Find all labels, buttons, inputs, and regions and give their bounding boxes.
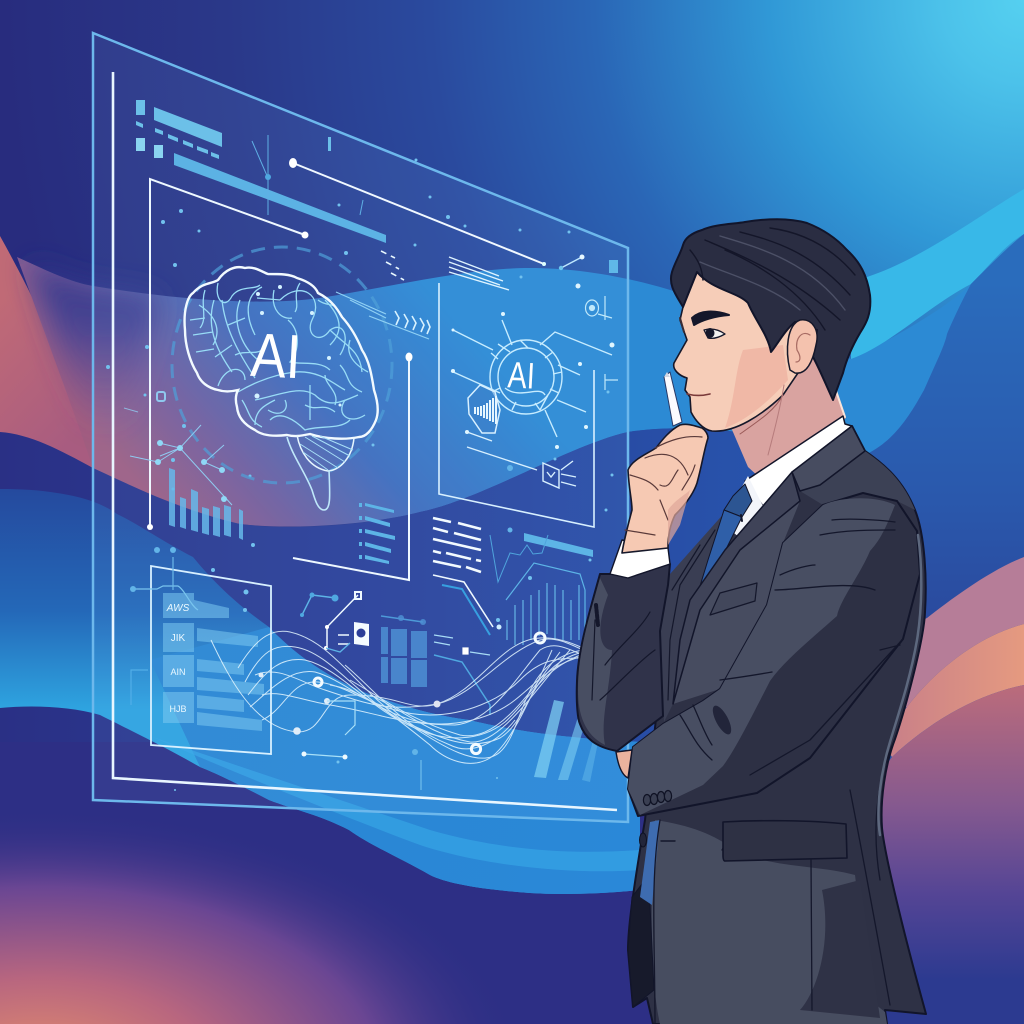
eye xyxy=(704,329,725,338)
small circuit icon xyxy=(300,592,369,652)
dashed ring xyxy=(172,247,392,483)
grid tiles xyxy=(381,615,427,687)
small connector xyxy=(302,701,421,790)
mouth xyxy=(687,394,710,396)
tie lower xyxy=(640,820,660,905)
text lines block xyxy=(433,518,481,572)
jacket pocket xyxy=(723,821,847,861)
list rows xyxy=(359,503,395,564)
AI circuit frame xyxy=(439,283,594,527)
ear xyxy=(787,320,817,373)
brain frame xyxy=(150,179,409,580)
scatter dots xyxy=(106,158,614,791)
hand xyxy=(622,424,708,553)
slanted bar xyxy=(524,533,593,557)
hair xyxy=(671,219,870,400)
jacket seams xyxy=(654,640,895,1024)
chevrons xyxy=(395,311,430,334)
jacket button xyxy=(640,833,646,847)
brain folds xyxy=(190,283,368,430)
icon: target small xyxy=(586,296,618,390)
tie xyxy=(688,484,752,625)
lapel xyxy=(673,426,865,704)
slanted bars xyxy=(534,700,600,782)
bar chart xyxy=(169,468,243,540)
inner lining xyxy=(628,880,654,1007)
network graph xyxy=(124,392,232,505)
wave data flow xyxy=(211,631,583,763)
panel glass xyxy=(93,33,628,822)
hidden hand under arm xyxy=(616,750,632,778)
brain stem xyxy=(287,437,330,510)
panel: data table: AIN xyxy=(170,667,186,677)
shirt collar xyxy=(730,416,852,540)
connector line xyxy=(289,158,546,266)
wave ring nodes xyxy=(314,633,545,754)
shoulder xyxy=(800,451,915,510)
breast pocket xyxy=(710,583,757,615)
icon: brain with AI xyxy=(172,247,392,510)
jacket lit lower front xyxy=(652,820,887,1024)
circuit line xyxy=(433,535,585,640)
back rim highlight xyxy=(878,535,921,835)
stat lines xyxy=(336,292,429,339)
front sleeve crossing arm xyxy=(628,493,920,816)
figure: thinking businessman xyxy=(577,219,926,1024)
sleeve highlight xyxy=(628,498,895,815)
eyebrow xyxy=(692,312,729,325)
pen xyxy=(664,372,682,426)
frame nodes xyxy=(147,232,412,530)
icon: checkbox xyxy=(467,447,576,488)
hair strands xyxy=(690,228,855,330)
AI label small: AI xyxy=(507,354,536,397)
jacket chest xyxy=(673,501,800,704)
neck and face xyxy=(674,270,846,478)
text lines block top xyxy=(449,257,509,290)
sleeve raised arm xyxy=(577,564,670,751)
panel inner frame xyxy=(113,72,617,810)
panel: data table xyxy=(130,547,271,754)
wave nodes xyxy=(258,672,440,735)
sleeve folds xyxy=(680,519,903,775)
panel: holographic dashboard xyxy=(93,33,628,822)
icon: AI circuit circle xyxy=(451,312,614,449)
AI label: AI xyxy=(249,321,303,392)
small labels lines xyxy=(434,635,490,715)
signal spikes xyxy=(507,583,579,645)
top-right square and node xyxy=(559,254,618,273)
sleeve buttons xyxy=(643,790,672,806)
panel: data table: AWS xyxy=(166,603,190,614)
torso jacket xyxy=(628,426,926,1024)
brain nodes xyxy=(254,285,342,406)
panel: data table: HJB xyxy=(169,704,187,714)
dash marks xyxy=(381,251,404,280)
panel: data table: JIK xyxy=(171,633,186,644)
header blocks xyxy=(136,100,386,243)
shirt cuff xyxy=(610,540,670,578)
brain outline xyxy=(185,267,378,439)
icon: hexagon bar chart xyxy=(465,385,500,441)
cerebellum xyxy=(297,435,354,471)
thin network lines xyxy=(252,135,582,268)
